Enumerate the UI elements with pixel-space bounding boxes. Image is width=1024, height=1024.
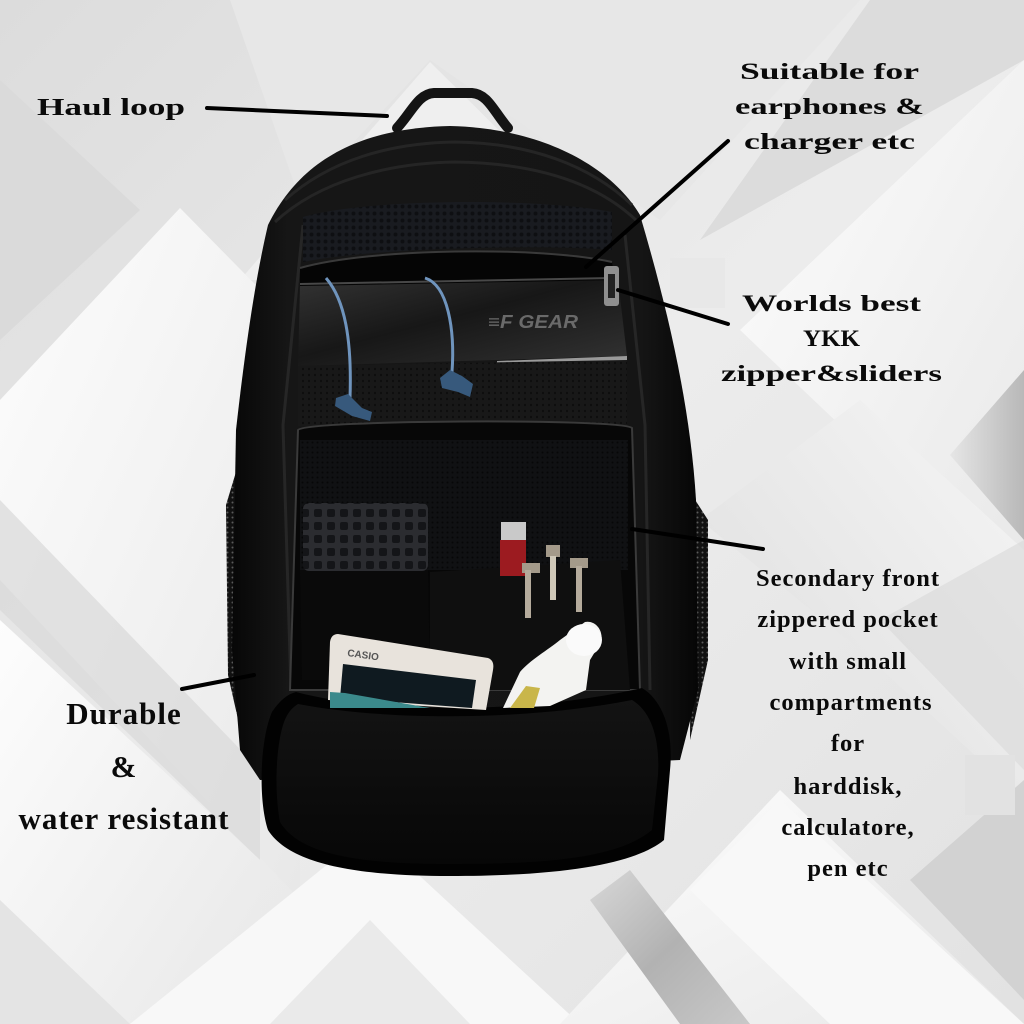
open front pocket interior (290, 421, 640, 690)
label: secondary front pocket (756, 565, 940, 882)
label: YKK zipper: zipper&sliders (721, 361, 942, 386)
leather panel (298, 280, 627, 366)
side mesh pockets (226, 472, 240, 728)
icon: calculator (328, 634, 493, 710)
label: durable and water resistant: & (111, 749, 137, 784)
label: secondary front pocket: compartments (769, 689, 933, 716)
label: YKK zipper: Worlds best (742, 291, 922, 316)
label: secondary front pocket: Secondary front (756, 565, 940, 592)
silver stripe (497, 356, 627, 366)
label: earphones and charger (735, 59, 924, 154)
backpack photo illustration (226, 93, 708, 876)
top zipper pocket opening (300, 251, 616, 290)
icon: usb drive (501, 522, 526, 542)
open front flap (262, 688, 671, 876)
label: secondary front pocket: with small (789, 648, 907, 675)
label: secondary front pocket: harddisk, (793, 773, 903, 800)
label: secondary front pocket: calculatore, (781, 814, 915, 841)
label: secondary front pocket: pen etc (807, 855, 889, 882)
label: YKK zipper: YKK (803, 326, 860, 351)
icon: haul loop handle (397, 93, 508, 128)
label: earphones and charger: charger etc (744, 129, 915, 154)
label: YKK zipper (721, 291, 942, 386)
logo: ≡F GEAR (488, 312, 578, 332)
side seams (283, 225, 303, 690)
inner pocket panel (300, 570, 430, 680)
dotted fabric panel (298, 360, 627, 426)
label: haul loop: Haul loop (37, 95, 185, 121)
label: earphones and charger: earphones & (735, 94, 924, 119)
icon: pens (522, 545, 588, 618)
earphones (326, 278, 350, 398)
icon: calculator: CASIO (347, 648, 380, 663)
label: durable and water resistant: water resistant (18, 801, 230, 836)
label: earphones and charger: Suitable for (740, 59, 919, 84)
callout lines (182, 108, 763, 689)
label: secondary front pocket: for (831, 730, 865, 757)
bag body (232, 126, 698, 780)
label: secondary front pocket: zippered pocket (757, 606, 939, 633)
mesh panel (303, 202, 612, 262)
label: durable and water resistant: Durable (66, 696, 182, 731)
icon: lotion bottle (503, 622, 602, 708)
label: durable and water resistant (18, 696, 230, 836)
icon: hard disk (303, 503, 428, 571)
top padded ridges (285, 142, 632, 205)
zip slider (604, 266, 619, 306)
